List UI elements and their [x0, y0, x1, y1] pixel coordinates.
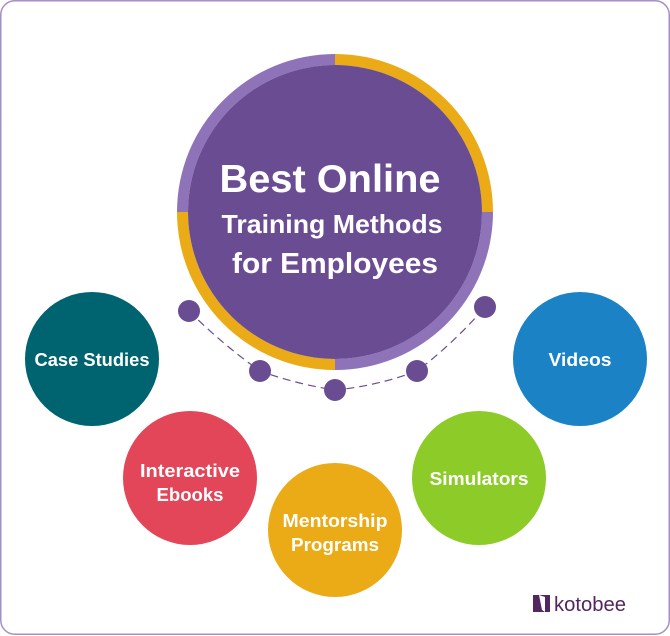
circle: Simulators: [412, 411, 546, 545]
title line 2: Training Methods: [222, 209, 442, 239]
logo icon: book: [533, 595, 550, 612]
ring: purple top-left quadrant: [177, 54, 335, 212]
logo wordmark: kotobee: [554, 594, 626, 616]
ring: purple bottom-right quadrant: [335, 212, 493, 370]
connector dots: [178, 296, 496, 401]
dashed connector arc: [189, 307, 485, 390]
title line 3: for Employees: [232, 248, 438, 280]
circle: Case Studies: Case Studies: [34, 349, 150, 370]
circle: Mentorship Programs: Mentorship: [282, 510, 388, 531]
central circle with title: [177, 54, 493, 370]
circle: Interactive Ebooks: Ebooks: [156, 484, 224, 505]
ring: amber bottom-left quadrant: [177, 212, 335, 370]
circle: Videos: Videos: [548, 349, 612, 370]
circle: Case Studies: [25, 292, 159, 426]
circle: Mentorship Programs: Programs: [291, 534, 379, 555]
title line 1: Best Online: [220, 158, 440, 201]
circle: Interactive Ebooks: [123, 411, 257, 545]
circle: Interactive Ebooks: Interactive: [140, 460, 240, 481]
circle: Mentorship Programs: [268, 463, 402, 597]
inner disc: [188, 65, 482, 359]
ring: amber top-right quadrant: [335, 54, 493, 212]
circle: Videos: [513, 292, 647, 426]
logo: kotobee: [533, 594, 626, 616]
circle: Simulators: Simulators: [430, 468, 528, 489]
